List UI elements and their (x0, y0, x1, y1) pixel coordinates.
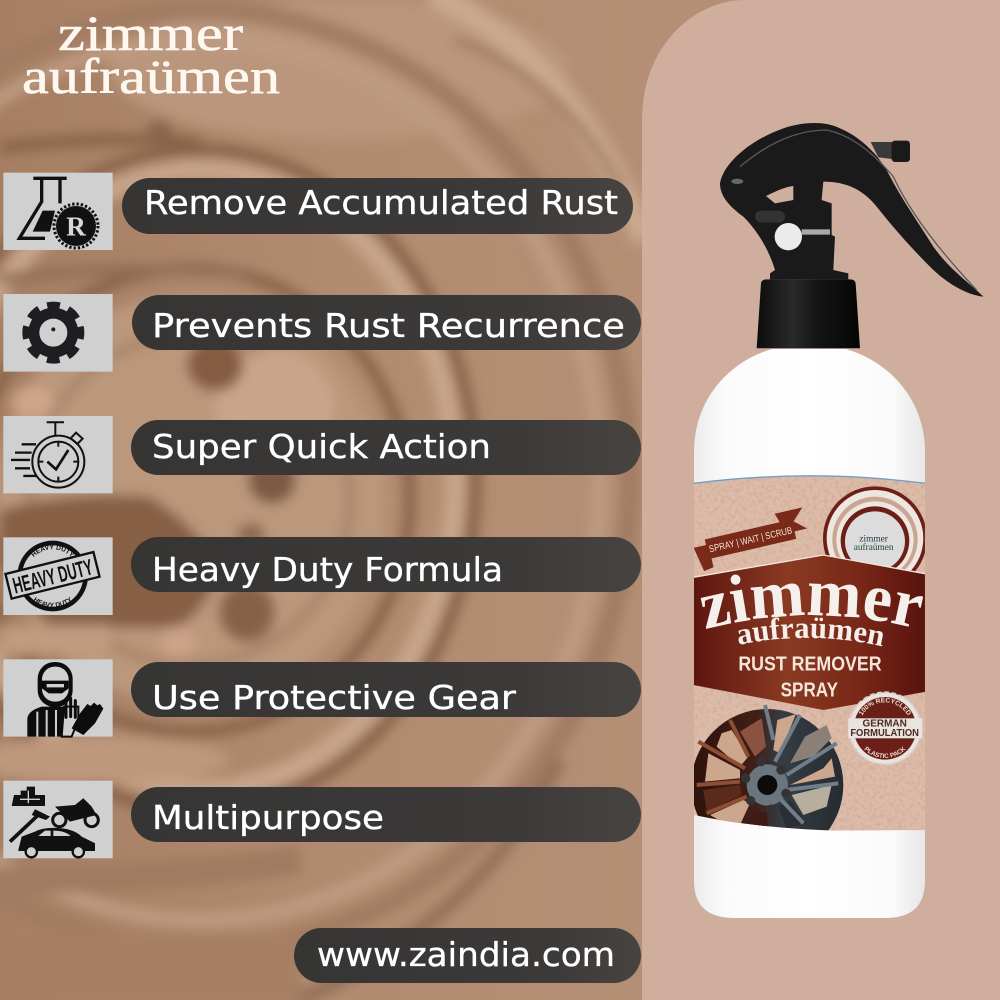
icon: multipurpose vehicles (3, 781, 113, 858)
icon: flask and rust gear: R (66, 211, 86, 241)
right product panel (642, 0, 1000, 1000)
pill: Use Protective Gear: Use Protective Gear (152, 678, 516, 717)
bottle body (694, 349, 925, 918)
german formulation badge: GERMAN (862, 719, 907, 730)
brand logo (22, 5, 280, 104)
seal logo (823, 486, 925, 572)
pill: website (294, 928, 641, 983)
brand wordmark on label: zimmer (700, 574, 924, 629)
brand logo: aufraümen (22, 48, 280, 104)
product name: RUST REMOVER (738, 654, 882, 676)
product label (694, 475, 925, 830)
product name (740, 656, 882, 696)
icon: gear (3, 294, 113, 372)
pill: Multipurpose (131, 787, 641, 842)
icon: stopwatch (3, 416, 113, 493)
pill: Prevents Rust Recurrence: Prevents Rust Recurrence (152, 306, 625, 345)
seal logo: zimmer (859, 534, 889, 544)
pill: Super Quick Action: Super Quick Action (152, 427, 491, 466)
german formulation badge (848, 691, 922, 766)
pill: Remove Accumulated Rust: Remove Accumulated Rust (144, 183, 618, 222)
seal logo: aufraümen (854, 542, 894, 553)
pill: Remove Accumulated Rust (122, 178, 633, 234)
maroon band (693, 555, 927, 710)
german formulation badge: FORMULATION (850, 728, 919, 739)
icon: heavy duty stamp: HEAVY DUTY (31, 545, 74, 557)
icon: heavy duty stamp: HEAVY DUTY (10, 554, 95, 598)
ribbon: spray wait scrub (690, 507, 811, 572)
product: spray bottle (694, 123, 984, 918)
pill: Super Quick Action (131, 420, 641, 475)
pill: Prevents Rust Recurrence (132, 295, 641, 350)
icon: heavy duty stamp: HEAVY DUTY (34, 596, 70, 607)
brand wordmark on label (700, 574, 924, 646)
german formulation badge: 100% RECYCLED (859, 698, 911, 716)
pill: Use Protective Gear (131, 662, 641, 717)
ribbon: spray wait scrub: SPRAY | WAIT | SCRUB (708, 525, 793, 555)
pill: Multipurpose: Multipurpose (152, 798, 384, 837)
icon: heavy duty stamp (3, 537, 113, 615)
brand wordmark on label: aufraümen (738, 618, 883, 646)
german formulation badge: PLASTIC PACK (864, 746, 906, 758)
pill: website: www.zaindia.com (317, 935, 615, 974)
rusty wheel (694, 704, 844, 830)
brand logo: zimmer (58, 5, 243, 61)
trigger sprayer head (720, 123, 983, 348)
icon: flask and rust gear (3, 173, 113, 250)
pill: Heavy Duty Formula (131, 537, 641, 592)
pill: Heavy Duty Formula: Heavy Duty Formula (152, 550, 503, 589)
product name: SPRAY (781, 680, 838, 702)
icon: protective gear (3, 659, 113, 737)
